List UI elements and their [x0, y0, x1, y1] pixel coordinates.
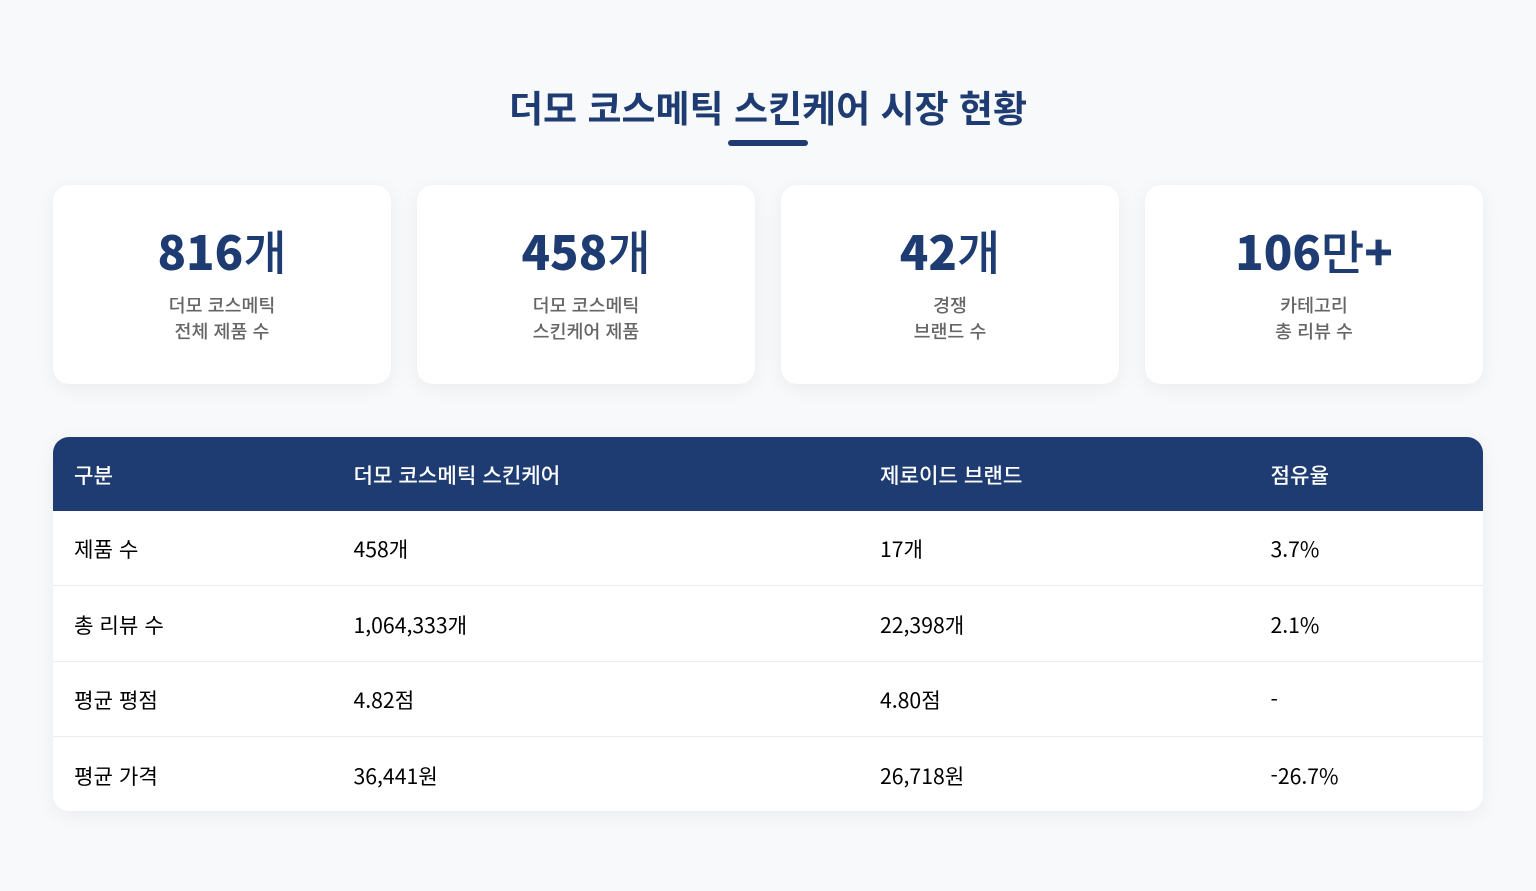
stat card: skincare products: 458개 — [521, 215, 651, 284]
row: average rating: - — [1270, 684, 1278, 715]
title underline — [728, 140, 808, 146]
row: average rating: 4.80점 — [880, 684, 941, 715]
row: average price — [74, 760, 1339, 791]
stat card: total reviews — [1145, 185, 1483, 384]
row: total reviews: 1,064,333개 — [354, 609, 467, 640]
stat card: total products: 전체 제품 수 — [175, 318, 269, 344]
row: total reviews: 2.1% — [1270, 609, 1319, 640]
stat card: total products: 더모 코스메틱 — [169, 292, 275, 318]
table header row: 제로이드 브랜드 — [880, 459, 1022, 490]
row: average price: 평균 가격 — [74, 760, 158, 791]
stat card: total products — [53, 185, 391, 384]
stat card: total reviews: 총 리뷰 수 — [1275, 318, 1353, 344]
row: product count: 458개 — [354, 533, 408, 564]
row: average rating: 평균 평점 — [74, 684, 158, 715]
table header row: 점유율 — [1270, 459, 1329, 490]
row: average rating: 4.82점 — [354, 684, 414, 715]
stat card: competing brands: 42개 — [900, 215, 1000, 284]
stat card: total reviews: 106만+ — [1235, 215, 1393, 284]
stat card: competing brands — [781, 185, 1119, 384]
row: product count: 제품 수 — [74, 533, 138, 564]
row: average price: 36,441원 — [354, 760, 438, 791]
row: product count: 17개 — [880, 533, 923, 564]
row: average rating — [53, 662, 1483, 737]
row: total reviews: 총 리뷰 수 — [74, 609, 164, 640]
stat card: skincare products: 더모 코스메틱 — [533, 292, 639, 318]
title: 더모 코스메틱 스킨케어 시장 현황 — [509, 78, 1027, 132]
row: average price: 26,718원 — [880, 760, 964, 791]
table header row — [53, 437, 1483, 511]
table header row: 구분 — [74, 459, 113, 490]
stat card: competing brands: 경쟁 — [933, 292, 967, 318]
comparison table — [53, 437, 1483, 811]
stat card: skincare products — [417, 185, 755, 384]
row: product count — [53, 511, 1483, 586]
row: total reviews — [53, 586, 1483, 662]
stat card: skincare products: 스킨케어 제품 — [533, 318, 639, 344]
row: total reviews: 22,398개 — [880, 609, 964, 640]
stat card: competing brands: 브랜드 수 — [914, 318, 986, 344]
row: average price: -26.7% — [1270, 760, 1339, 791]
table header row: 더모 코스메틱 스킨케어 — [354, 459, 560, 490]
stat card: total products: 816개 — [157, 215, 287, 284]
row: product count: 3.7% — [1270, 533, 1319, 564]
stat card: total reviews: 카테고리 — [1280, 292, 1348, 318]
